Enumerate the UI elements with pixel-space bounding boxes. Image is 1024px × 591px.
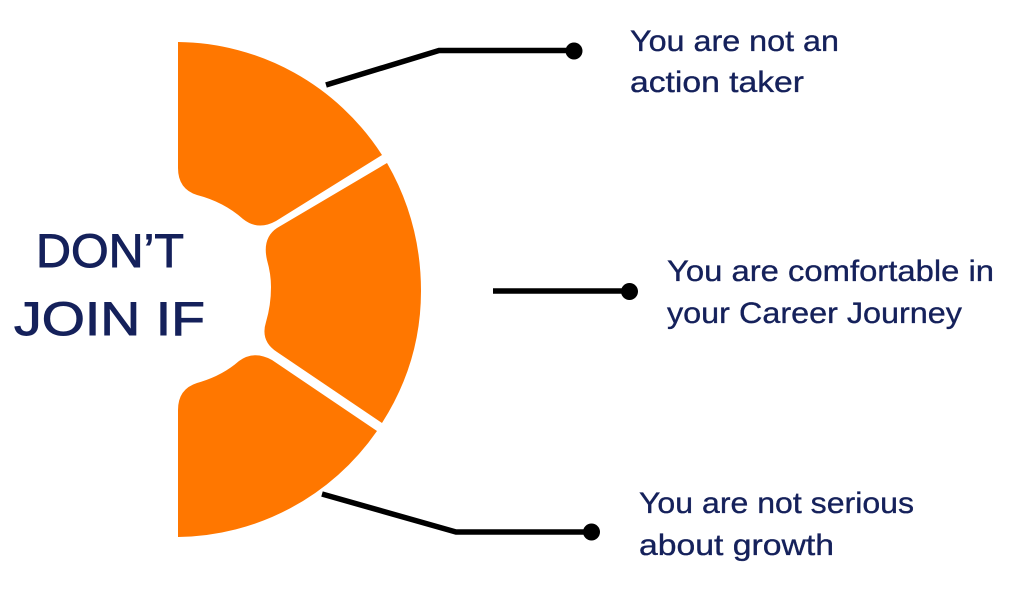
bottom orange segment: [178, 355, 377, 537]
text: not serious: [639, 487, 914, 562]
text: action taker: action taker: [630, 66, 804, 99]
connector: top: [326, 42, 582, 85]
connector: bottom: [322, 494, 600, 540]
text: comfortable: your Career Journey: [667, 297, 962, 330]
title: don't join if: JOIN IF: [14, 292, 205, 345]
title: don't join if: [14, 224, 205, 345]
text: not serious: You are not serious: [639, 487, 914, 520]
middle orange segment: [264, 163, 421, 423]
connector: middle: [493, 283, 638, 300]
text: comfortable: [667, 255, 994, 330]
text: action taker: [630, 25, 839, 99]
top orange segment: [178, 42, 382, 226]
text: comfortable: You are comfortable in: [667, 255, 994, 288]
title: don't join if: DON’T: [36, 224, 184, 277]
text: action taker: You are not an: [630, 25, 839, 58]
text: not serious: about growth: [639, 529, 834, 562]
